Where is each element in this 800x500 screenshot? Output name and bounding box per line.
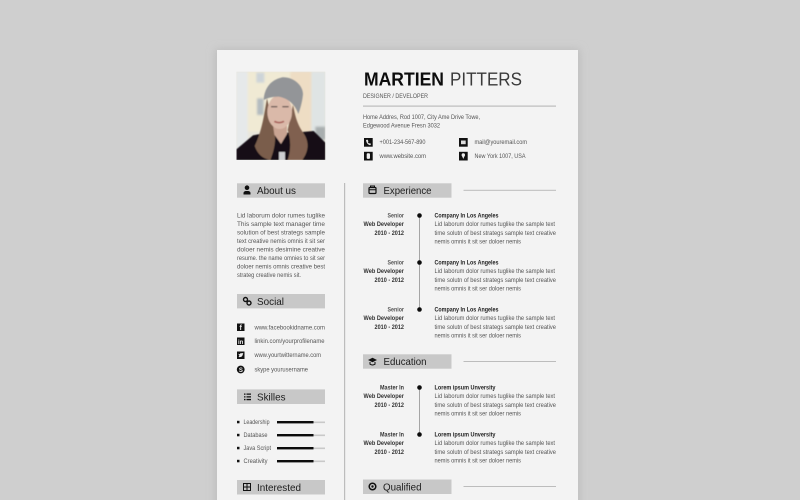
panel: experience — [363, 183, 556, 339]
panel: skills — [237, 389, 325, 465]
skill: leadership: Leadership — [244, 419, 270, 426]
entry: education 1: 2010 - 2012 — [374, 402, 404, 409]
entry: education 1: time solutn of best strategs sample text creative — [434, 402, 556, 409]
social: facebook — [237, 324, 325, 332]
name title: PITTERS — [450, 68, 522, 90]
contact: email — [459, 138, 527, 147]
entry: education 2: Web Developer — [364, 440, 404, 447]
timeline: education — [417, 385, 422, 437]
social: skype — [237, 366, 308, 374]
panel: social — [237, 294, 325, 374]
entry: experience 3: 2010 - 2012 — [374, 324, 404, 331]
entry: experience 1: Lid laborum dolor rumes tuglike the sample text — [434, 221, 555, 228]
entry: education 2: Master In — [380, 432, 404, 438]
skill: java script: Java Script — [244, 445, 271, 452]
panel: about us — [237, 183, 326, 279]
entry: experience 2 — [364, 260, 556, 292]
heading: interested: Interested — [257, 482, 301, 494]
heading: about us: About us — [257, 185, 296, 197]
name title — [364, 68, 522, 90]
about text: This sample text manager time — [237, 221, 326, 228]
entry: education 2: Lorem ipsum Unversity — [434, 432, 496, 438]
entry: experience 1 — [364, 212, 556, 245]
entry: experience 1: Web Developer — [364, 221, 404, 228]
panel: education — [363, 354, 556, 464]
entry: experience 3 — [364, 306, 556, 339]
shirt — [279, 152, 285, 160]
address: Home Addres, Rod 1007, City Ame Drive Towe, — [363, 114, 480, 121]
entry: education 2: nemis omnis it sit ser doloer nemis — [434, 457, 521, 464]
entry: experience 2: Lid laborum dolor rumes tuglike the sample text — [434, 268, 555, 275]
address — [363, 114, 480, 130]
entry: experience 2: time solutn of best strategs sample text creative — [434, 277, 556, 284]
entry: experience 2: Senior — [388, 260, 404, 266]
contact: phone: +001-234-567-890 — [380, 139, 426, 146]
entry: experience 2: nemis omnis it sit ser doloer nemis — [434, 285, 521, 292]
name title: MARTIEN — [364, 68, 444, 90]
entry: experience 1: Company In Los Angeles — [434, 212, 499, 220]
entry: education 2: 2010 - 2012 — [374, 449, 404, 456]
social: skype: skype yourusername — [254, 366, 308, 374]
skill: database: Database — [244, 432, 268, 439]
entry: education 2: time solutn of best strategs sample text creative — [434, 449, 556, 456]
skill: creativity: Creativity — [244, 458, 268, 465]
entry: experience 2: Company In Los Angeles — [434, 260, 499, 266]
entry: experience 3: Company In Los Angeles — [434, 306, 499, 314]
heading: education: Education — [384, 356, 427, 368]
about text: doloer nemis omnis creative best — [237, 264, 325, 271]
about text — [237, 212, 326, 279]
contact: website: www.website.com — [379, 153, 426, 160]
social: linkedin — [237, 338, 325, 346]
entry: experience 3: nemis omnis it sit ser doloer nemis — [434, 332, 521, 339]
heading: qualified: Qualified — [383, 482, 422, 494]
social: linkedin: in — [238, 340, 244, 346]
entry: experience 1: nemis omnis it sit ser doloer nemis — [434, 238, 521, 245]
entry: experience 3: Senior — [388, 306, 404, 314]
column divider — [344, 183, 345, 500]
about text: resume. the name omnies to sit ser — [237, 255, 325, 262]
entry: experience 1: Senior — [388, 212, 404, 220]
about text: Lid laborum dolor rumes tuglike — [237, 212, 325, 219]
social: facebook: f — [240, 325, 242, 332]
entry: experience 1: time solutn of best strategs sample text creative — [434, 230, 556, 237]
social: twitter: www.yourtwittername.com — [254, 352, 321, 359]
heading: social: Social — [257, 296, 284, 308]
about text: solution of best strategs sample — [237, 230, 325, 237]
about text: text creative nemis omnis it sit ser — [237, 238, 325, 245]
entry: education 1 — [364, 384, 556, 417]
address: Edgewood Avenue Fresn 3032 — [363, 122, 440, 130]
entry: education 1: Lid laborum dolor rumes tuglike the sample text — [434, 393, 555, 400]
social: facebook: www.facebookidname.com — [254, 324, 325, 332]
heading: experience: Experience — [384, 185, 432, 197]
coat — [236, 131, 325, 160]
heading: qualified — [363, 480, 556, 494]
entry: education 1: Web Developer — [364, 393, 404, 400]
entry: experience 3: Web Developer — [364, 315, 404, 322]
neck — [273, 125, 287, 144]
entry: experience 2: 2010 - 2012 — [374, 277, 404, 284]
job subtitle: DESIGNER / DEVELOPER — [363, 93, 428, 100]
entry: experience 2: Web Developer — [364, 268, 404, 275]
contact: location: New York 1007, USA — [474, 153, 526, 160]
about text: strateg creative nemis sit. — [237, 272, 301, 279]
contact: phone — [364, 138, 426, 147]
entry: education 1: nemis omnis it sit ser doloer nemis — [434, 410, 521, 417]
entry: education 1: Master In — [380, 384, 404, 392]
resume sheet — [215, 49, 580, 500]
entry: experience 3: Lid laborum dolor rumes tuglike the sample text — [434, 315, 555, 322]
about text: doloer nemis desimine creative — [237, 246, 325, 254]
timeline: experience — [417, 213, 422, 312]
entry: experience 1: 2010 - 2012 — [374, 230, 404, 237]
face — [267, 95, 292, 129]
heading: education — [363, 354, 556, 369]
contact: location — [459, 152, 526, 160]
heading: experience — [363, 183, 556, 198]
hat — [264, 77, 303, 114]
contact: website — [364, 152, 426, 160]
entry: education 2 — [364, 432, 556, 464]
entry: experience 3: time solutn of best strategs sample text creative — [434, 324, 556, 331]
entry: education 1: Lorem ipsum Unversity — [434, 384, 496, 392]
header rule — [363, 106, 556, 107]
social: linkedin: linkin.com/yourprofilename — [254, 338, 325, 345]
right hair lock — [288, 105, 308, 160]
social: skype: S — [239, 368, 243, 374]
entry: education 2: Lid laborum dolor rumes tuglike the sample text — [434, 440, 555, 447]
contact: email: mail@youremail.com — [474, 139, 527, 146]
left hair lock — [255, 98, 275, 160]
heading: skilles: Skilles — [257, 392, 286, 404]
heading: interested — [237, 480, 325, 494]
portrait photo — [236, 72, 325, 160]
